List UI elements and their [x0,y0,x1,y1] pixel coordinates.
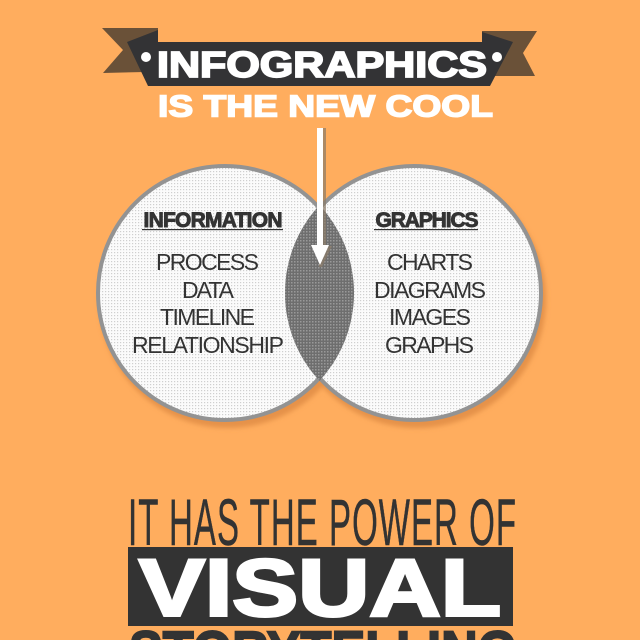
subtitle: IS THE NEW COOL [158,88,493,123]
power line: IT HAS THE POWER OF [128,487,516,560]
left circle [98,166,352,420]
right circle heading: GRAPHICS [376,209,478,232]
left circle list: TIMELINE [160,304,255,330]
banner dot left [141,52,151,62]
left circle list [132,249,284,358]
left circle list: PROCESS [156,249,259,275]
right circle list: CHARTS [387,249,473,275]
right circle list: IMAGES [389,304,471,330]
banner dot right [492,52,502,62]
visual block [128,544,513,634]
right circle [287,166,541,420]
left circle list: RELATIONSHIP [132,332,284,358]
left circle heading: INFORMATION [144,209,282,232]
banner right tail [482,31,537,76]
banner main ribbon [127,30,513,86]
venn diagram [98,164,546,428]
visual word: VISUAL [139,544,501,634]
circle shadows [99,170,546,428]
right circle list: GRAPHS [385,332,474,358]
left circle list: DATA [182,277,235,303]
banner title: INFOGRAPHICS [157,44,487,85]
banner [102,28,537,86]
right circle list [374,249,486,358]
arrow [311,128,332,267]
banner left tail [102,28,158,73]
overlap lens [285,208,354,380]
right circle list: DIAGRAMS [374,277,486,303]
